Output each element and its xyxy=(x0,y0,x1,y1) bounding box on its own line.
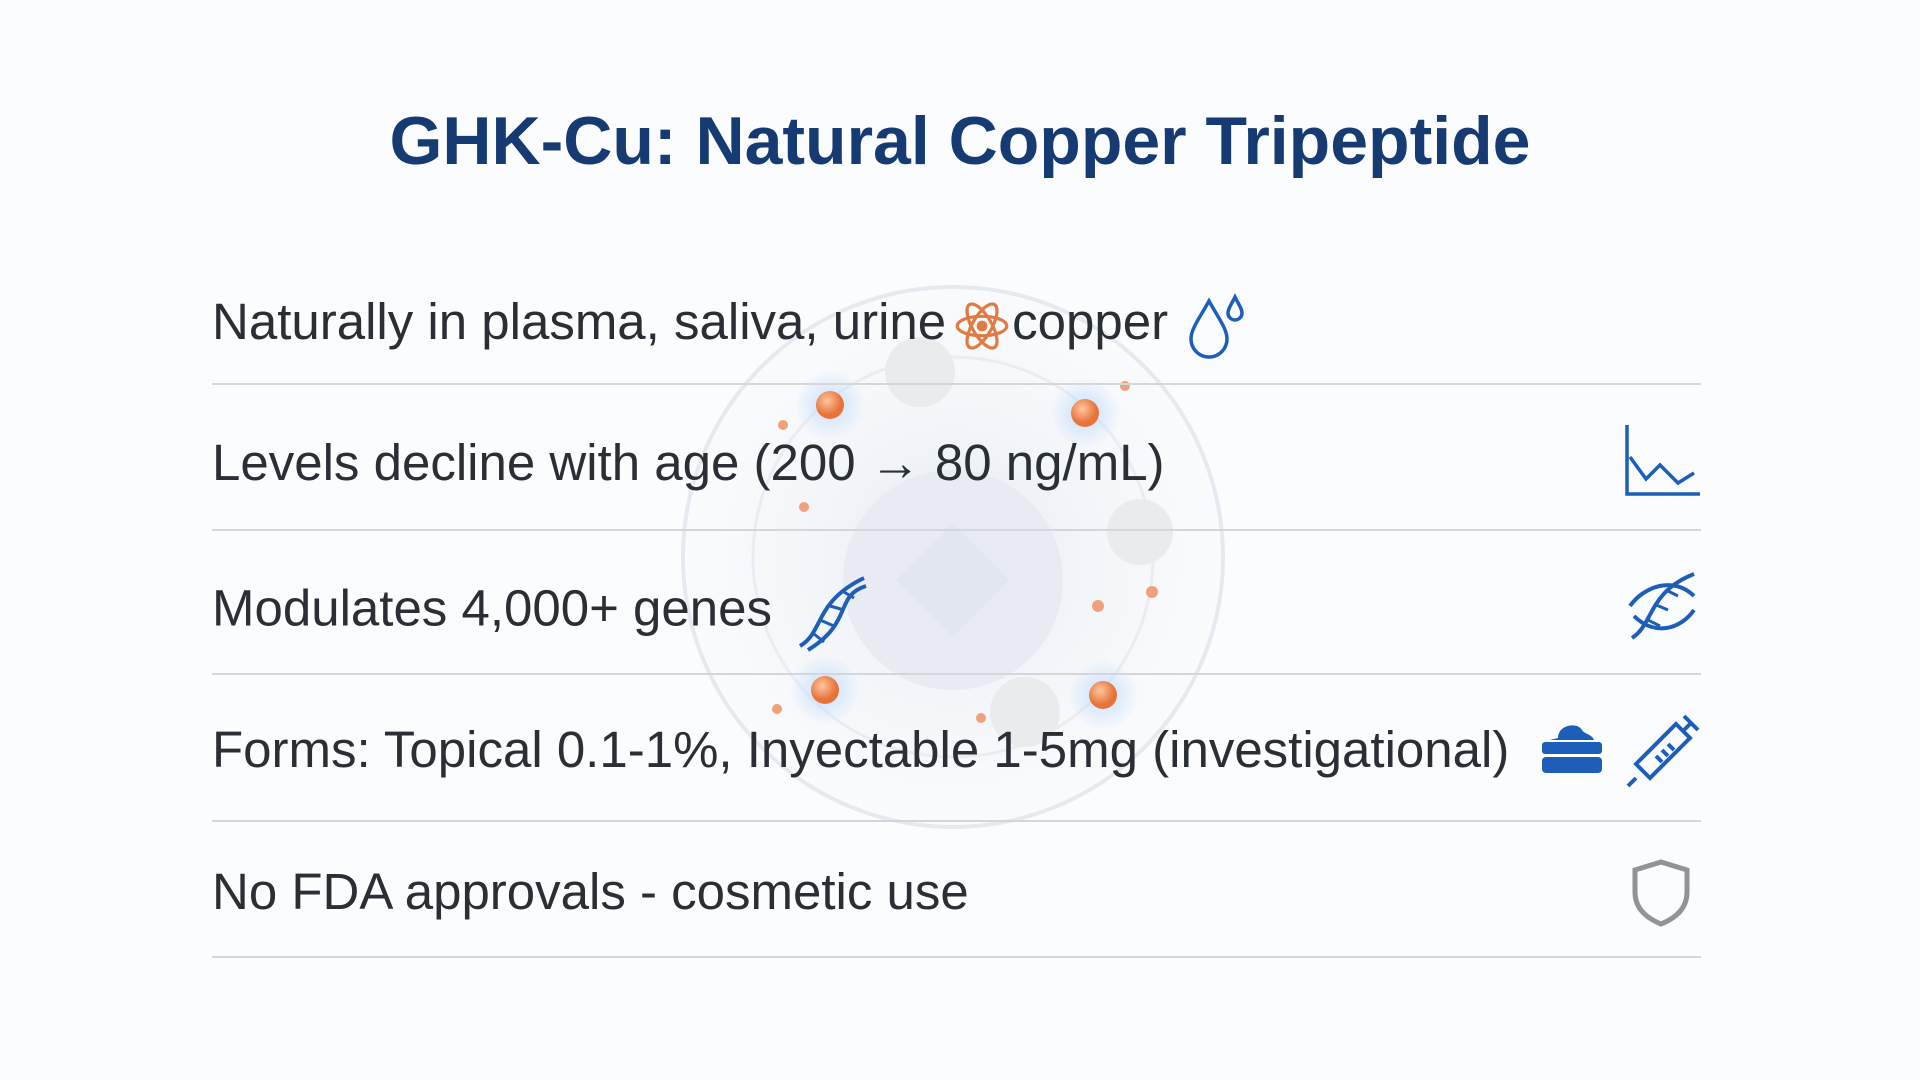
icon: shield xyxy=(1632,859,1690,927)
icon: water drops xyxy=(1189,293,1244,359)
row 1: plasma, saliva, urine: Naturally in plasma, saliva, urine copper xyxy=(212,293,1168,350)
icon: syringe xyxy=(1626,714,1700,788)
icon: DNA xyxy=(799,576,867,652)
row 5 text: No FDA approvals - cosmetic use xyxy=(212,863,969,920)
row 2 text: Levels decline with age (200 → 80 ng/mL) xyxy=(212,434,1165,491)
row 3 text xyxy=(212,576,867,652)
row 3 text: Modulates 4,000+ genes xyxy=(212,579,772,636)
icon: declining chart xyxy=(1625,425,1700,496)
row 4 text: Forms: Topical 0.1-1%, Inyectable 1-5mg (investigational) xyxy=(212,721,1509,778)
icon: atom xyxy=(956,302,1008,350)
icon: cream jar xyxy=(1542,725,1602,773)
title: GHK-Cu: Natural Copper Tripeptide xyxy=(390,103,1530,179)
icon: DNA circle xyxy=(1628,572,1696,640)
